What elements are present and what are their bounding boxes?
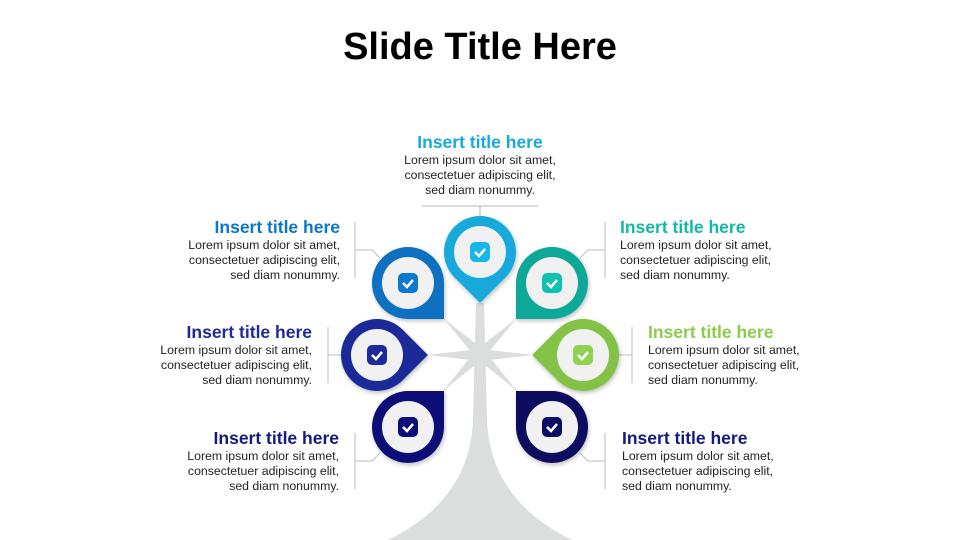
text: top [404,132,556,197]
pin: upper-left [372,247,444,319]
pin: lower-left [372,391,444,463]
text: upper-right: consectetuer adipiscing elit, [620,253,771,267]
text: mid-right [648,322,800,387]
text: upper-right [620,217,772,282]
title: Slide Title Here [343,26,617,68]
text: upper-left: Insert title here [215,217,340,237]
text: lower-left: Lorem ipsum dolor sit amet, [187,449,339,463]
text: upper-left [188,217,340,282]
text: mid-left: consectetuer adipiscing elit, [161,358,312,372]
text: mid-right: Lorem ipsum dolor sit amet, [648,343,800,357]
text: mid-left: Insert title here [187,322,312,342]
text: upper-left: consectetuer adipiscing elit, [189,253,340,267]
text: top: consectetuer adipiscing elit, [404,168,556,182]
text: upper-right: sed diam nonummy. [620,268,730,282]
pin: top [429,201,531,303]
text: lower-left: sed diam nonummy. [229,479,339,493]
tree trunk and branches [388,303,572,540]
pin: upper-right [516,247,588,319]
text: mid-left: sed diam nonummy. [202,373,312,387]
text: lower-right [622,428,774,493]
text: mid-right: Insert title here [648,322,773,342]
text: upper-right: Lorem ipsum dolor sit amet, [620,238,772,252]
text: top: sed diam nonummy. [425,183,535,197]
text: lower-left: consectetuer adipiscing elit, [188,464,339,478]
pin: mid-right [532,304,634,406]
text: upper-left: sed diam nonummy. [230,268,340,282]
text: lower-right: Insert title here [622,428,747,448]
text: lower-right: sed diam nonummy. [622,479,732,493]
text: lower-right: consectetuer adipiscing elit, [622,464,773,478]
pin: lower-right [516,391,588,463]
text: lower-left: Insert title here [214,428,339,448]
text: top: Lorem ipsum dolor sit amet, [404,153,556,167]
text: mid-right: sed diam nonummy. [648,373,758,387]
text: lower-left [187,428,339,493]
pin: mid-left [326,304,428,406]
text: mid-left: Lorem ipsum dolor sit amet, [160,343,312,357]
text: upper-left: Lorem ipsum dolor sit amet, [188,238,340,252]
text: top: Insert title here [417,132,543,152]
text: upper-right: Insert title here [620,217,745,237]
text: mid-right: consectetuer adipiscing elit, [648,358,799,372]
text: lower-right: Lorem ipsum dolor sit amet, [622,449,774,463]
text: mid-left [160,322,312,387]
connector lines [328,206,632,489]
